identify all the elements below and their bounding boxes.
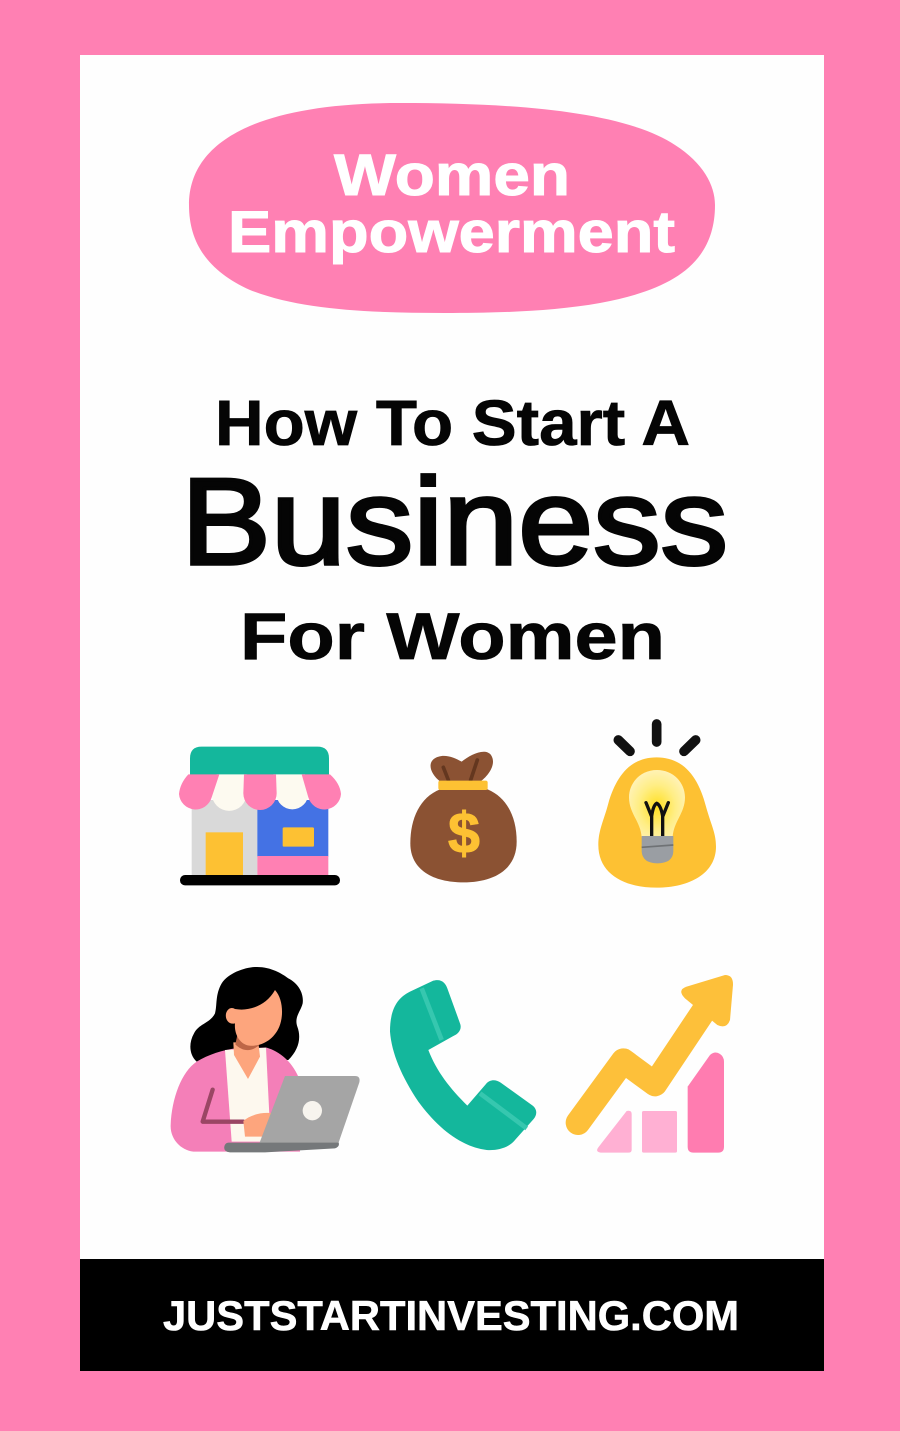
heading [181,387,728,673]
badge text line 2: Empowerment [228,200,675,265]
icon: money bag [410,752,517,882]
chart bars [597,1053,724,1153]
icon: storefront [179,747,341,885]
heading line 1: How To Start A [215,387,690,459]
heading line 2: Business [181,454,728,591]
icon: telephone handset [390,980,536,1150]
badge: Women Empowerment [189,103,715,313]
dollar sign: $ [448,802,480,866]
footer website text: JUSTSTARTINVESTING.COM [163,1292,739,1339]
white content panel [80,55,824,1259]
badge text line 1: Women [334,143,570,208]
heading line 3: For Women [240,599,665,673]
icon: light bulb with rays [598,724,716,888]
icon: growth chart with arrow [578,975,733,1153]
icon: woman with laptop [171,967,360,1152]
footer band [80,1259,824,1371]
growth arrow [578,975,733,1123]
